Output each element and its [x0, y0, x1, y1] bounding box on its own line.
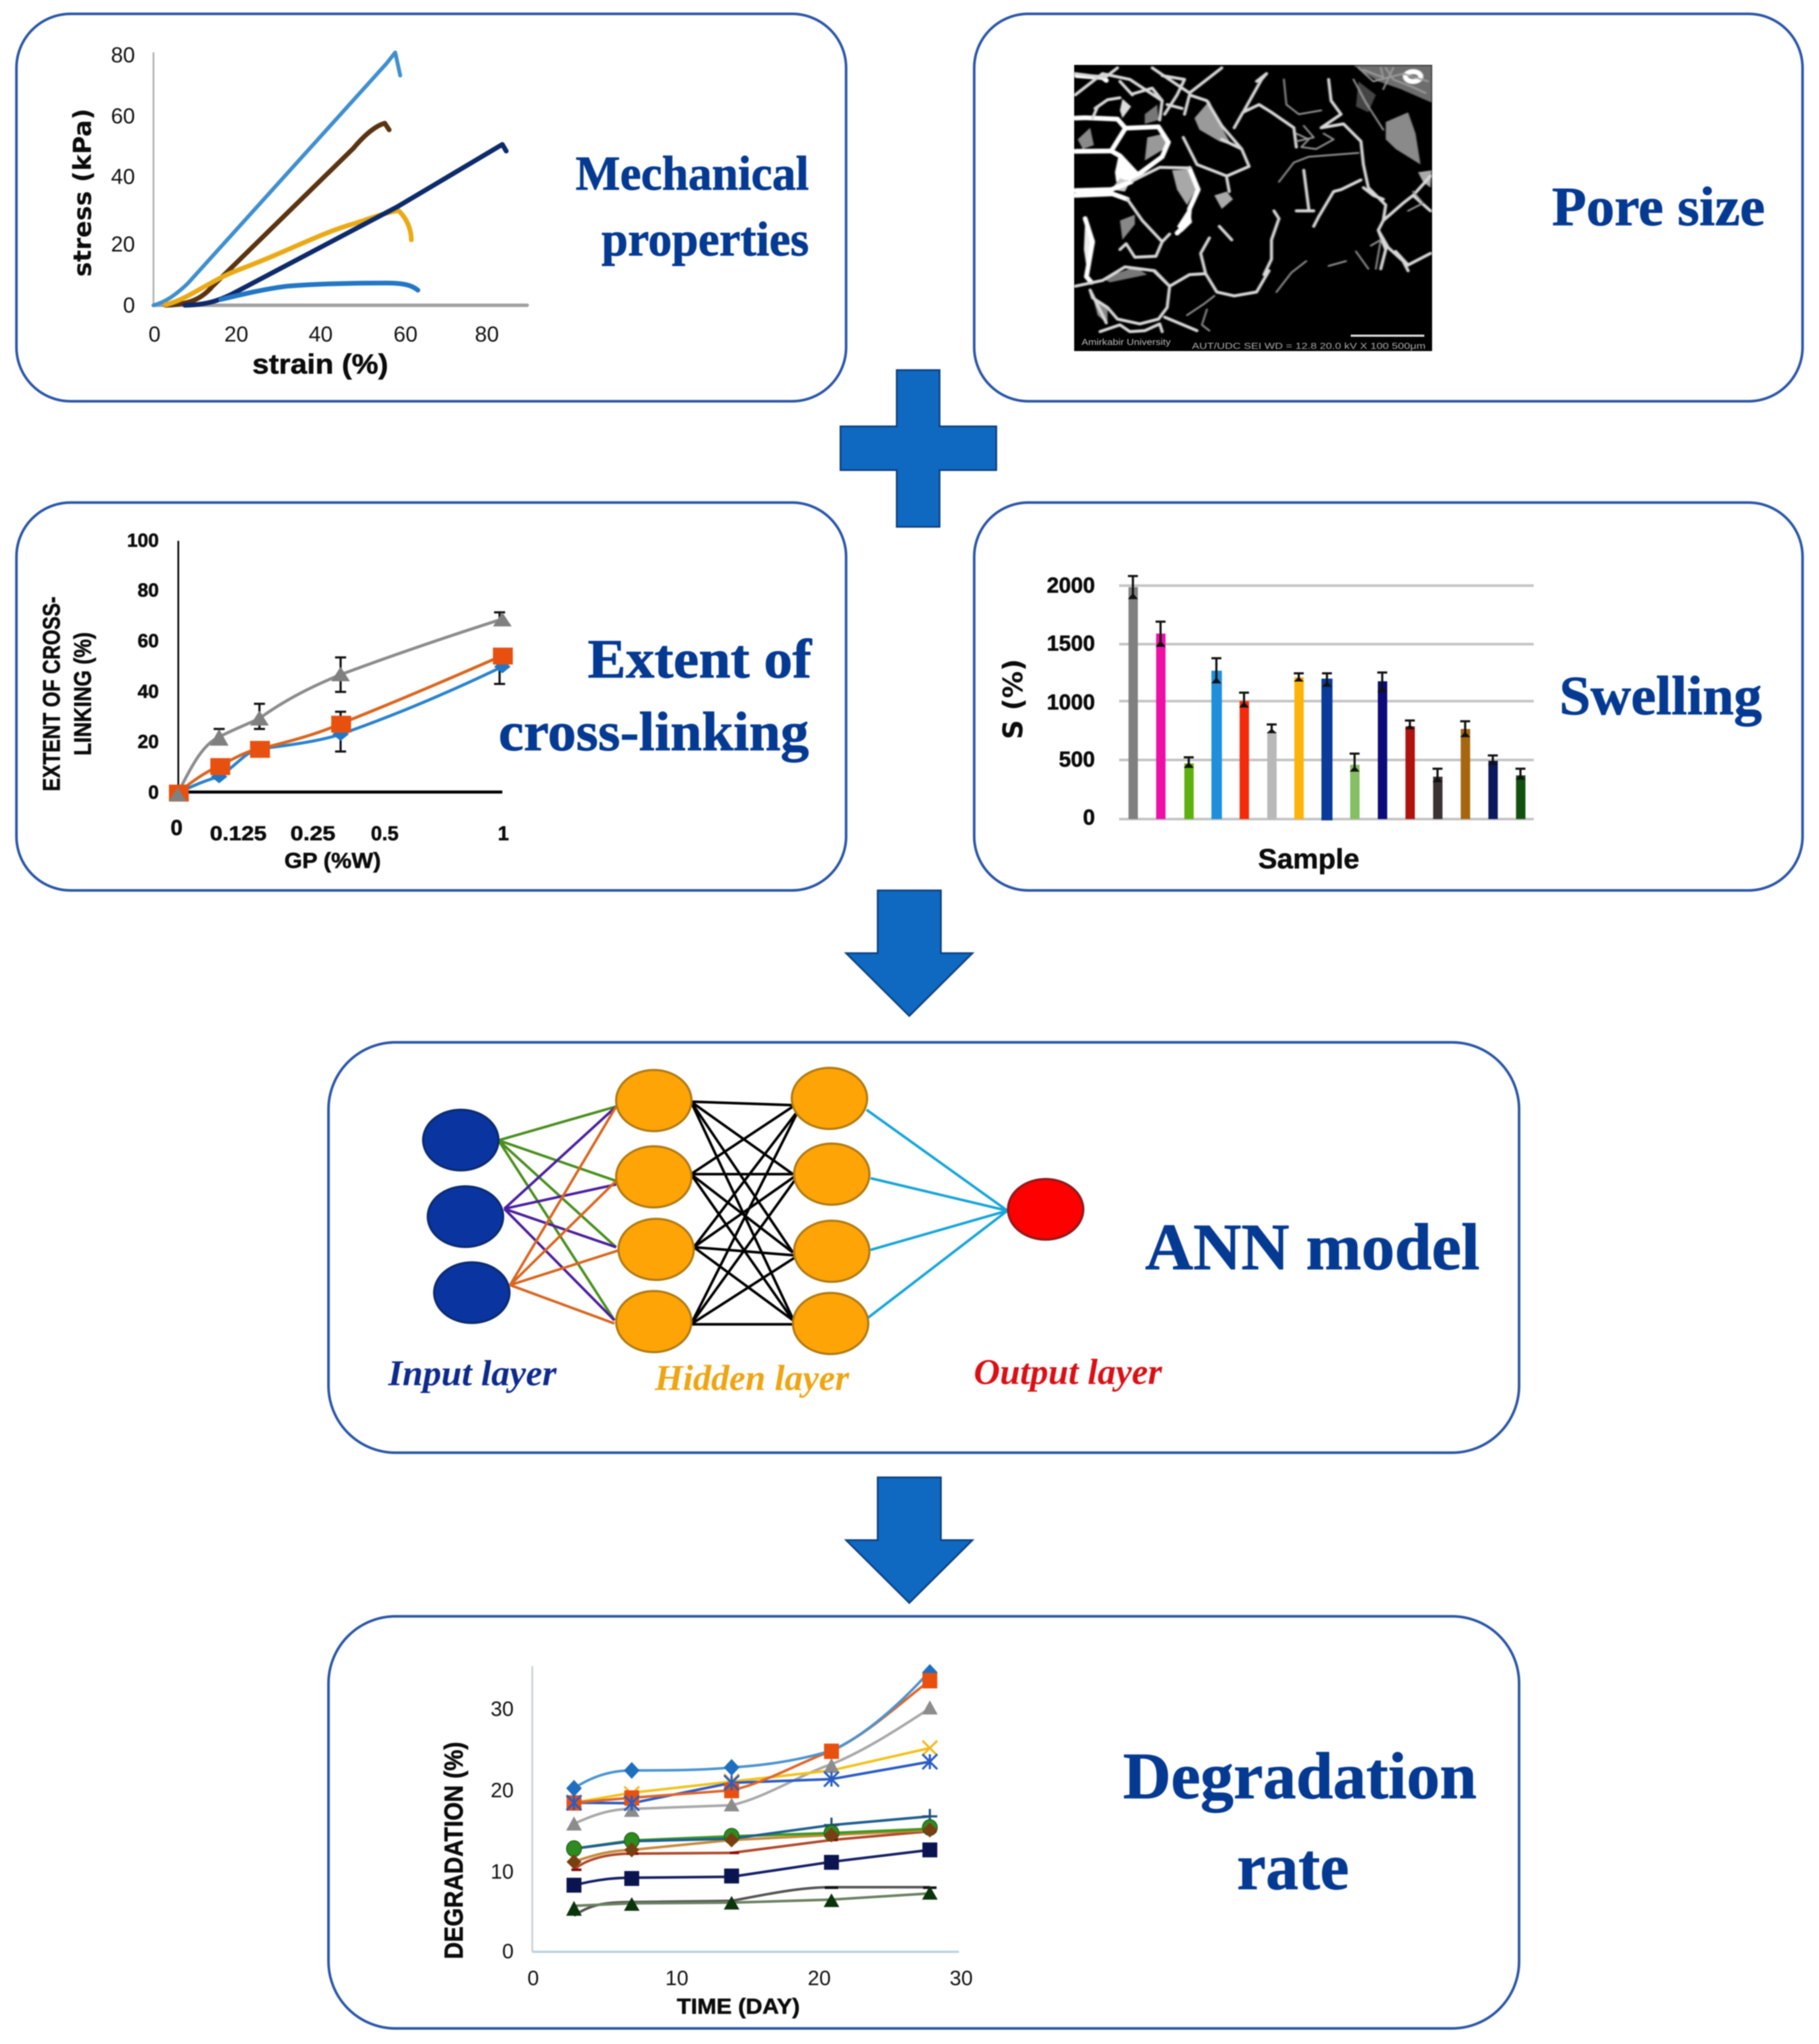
heading: Degradation rate: [1123, 1740, 1477, 1904]
diagram: neural network: Output layer: [974, 1352, 1162, 1392]
chart: stress-strain curves: 40: [111, 164, 135, 189]
chart: stress-strain curves: [68, 43, 527, 380]
chart: degradation over time: 10: [665, 1967, 689, 1990]
arrow: down to ANN model: [846, 890, 972, 1016]
chart: extent of cross-linking vs GP: 20: [138, 731, 159, 752]
chart: stress-strain curves: 40: [309, 322, 333, 346]
chart: extent of cross-linking vs GP: 0.125: [210, 822, 267, 845]
chart: extent of cross-linking vs GP: 0: [148, 782, 159, 803]
icon: plus sign: [840, 370, 996, 527]
panel: ANN model: [328, 1042, 1519, 1453]
chart: extent of cross-linking vs GP: LINKING (%): [69, 632, 96, 756]
panel: mechanical properties: [16, 14, 846, 401]
heading: Pore size: Pore size: [1552, 176, 1765, 237]
heading: Mechanical properties: Mechanical: [576, 147, 809, 200]
chart: degradation over time: TIME (DAY): [677, 1994, 800, 2018]
heading: Mechanical properties: [576, 147, 809, 266]
chart: swelling bar chart: [997, 573, 1534, 874]
heading: Extent of cross-linking: cross-linking: [499, 701, 809, 762]
chart: stress-strain curves: strain (%): [252, 348, 388, 380]
chart: degradation over time: 30: [491, 1698, 514, 1721]
chart: extent of cross-linking vs GP: 0: [171, 816, 183, 840]
heading: Degradation rate: Degradation: [1123, 1740, 1477, 1813]
chart: swelling bar chart: 1500: [1047, 631, 1095, 655]
chart: swelling bar chart: 1000: [1047, 690, 1095, 714]
chart: degradation over time: 20: [491, 1779, 514, 1802]
heading: Extent of cross-linking: Extent of: [588, 628, 812, 690]
chart: stress-strain curves: 20: [224, 322, 248, 346]
chart: degradation over time: 0: [502, 1940, 514, 1963]
chart: degradation over time: 10: [491, 1860, 514, 1883]
chart: extent of cross-linking vs GP: 0.5: [371, 822, 399, 845]
chart: extent of cross-linking vs GP: [38, 530, 513, 873]
image: SEM micrograph of porous scaffold: Amirkabir University: [1082, 338, 1171, 347]
chart: stress-strain curves: 80: [475, 322, 499, 346]
chart: stress-strain curves: 20: [111, 232, 135, 256]
chart: extent of cross-linking vs GP: 80: [138, 580, 159, 601]
chart: degradation over time: [439, 1664, 973, 2018]
chart: extent of cross-linking vs GP: EXTENT OF CROSS-: [38, 596, 65, 791]
chart: extent of cross-linking vs GP: 1: [498, 822, 509, 845]
chart: swelling bar chart: 2000: [1047, 573, 1095, 597]
image: SEM micrograph of porous scaffold: AUT/UDC SEI WD = 12.8 20.0 kV X 100 500μm: [1192, 342, 1426, 351]
chart: swelling bar chart: S (%): [997, 659, 1029, 739]
chart: stress-strain curves: 0: [148, 322, 161, 346]
chart: extent of cross-linking vs GP: 60: [138, 630, 159, 651]
chart: degradation over time: 30: [950, 1967, 973, 1990]
panel: extent of cross-linking: [16, 503, 846, 890]
chart: stress-strain curves: 0: [123, 293, 135, 317]
chart: degradation over time: 20: [808, 1967, 831, 1990]
panel: swelling: [974, 503, 1803, 890]
heading: Degradation rate: rate: [1237, 1831, 1349, 1904]
diagram: neural network: Hidden layer: [654, 1358, 850, 1398]
chart: stress-strain curves: 60: [111, 104, 135, 128]
panel: degradation rate: [328, 1616, 1519, 2028]
arrow: down to degradation rate: [846, 1477, 972, 1603]
chart: extent of cross-linking vs GP: GP (%W): [284, 848, 381, 873]
chart: stress-strain curves: stress (kPa): [68, 108, 97, 277]
chart: stress-strain curves: 60: [393, 322, 418, 346]
diagram: neural network: [388, 1068, 1162, 1398]
chart: degradation over time: 0: [528, 1967, 539, 1990]
chart: extent of cross-linking vs GP: 100: [127, 530, 159, 551]
heading: Mechanical properties: properties: [602, 213, 809, 266]
diagram: neural network: Input layer: [388, 1353, 557, 1393]
heading: Extent of cross-linking: [499, 628, 812, 762]
panel: pore size: [974, 14, 1803, 401]
chart: swelling bar chart: Sample: [1258, 843, 1359, 874]
image: SEM micrograph of porous scaffold: [1074, 65, 1432, 351]
chart: stress-strain curves: 80: [111, 43, 135, 67]
chart: degradation over time: DEGRADATION (%): [439, 1742, 468, 1959]
chart: extent of cross-linking vs GP: 40: [138, 681, 159, 702]
chart: swelling bar chart: 0: [1083, 805, 1095, 829]
chart: extent of cross-linking vs GP: 0.25: [290, 822, 335, 845]
chart: swelling bar chart: 500: [1059, 747, 1095, 771]
heading: ANN model: ANN model: [1145, 1211, 1480, 1284]
heading: Swelling: Swelling: [1559, 665, 1762, 726]
